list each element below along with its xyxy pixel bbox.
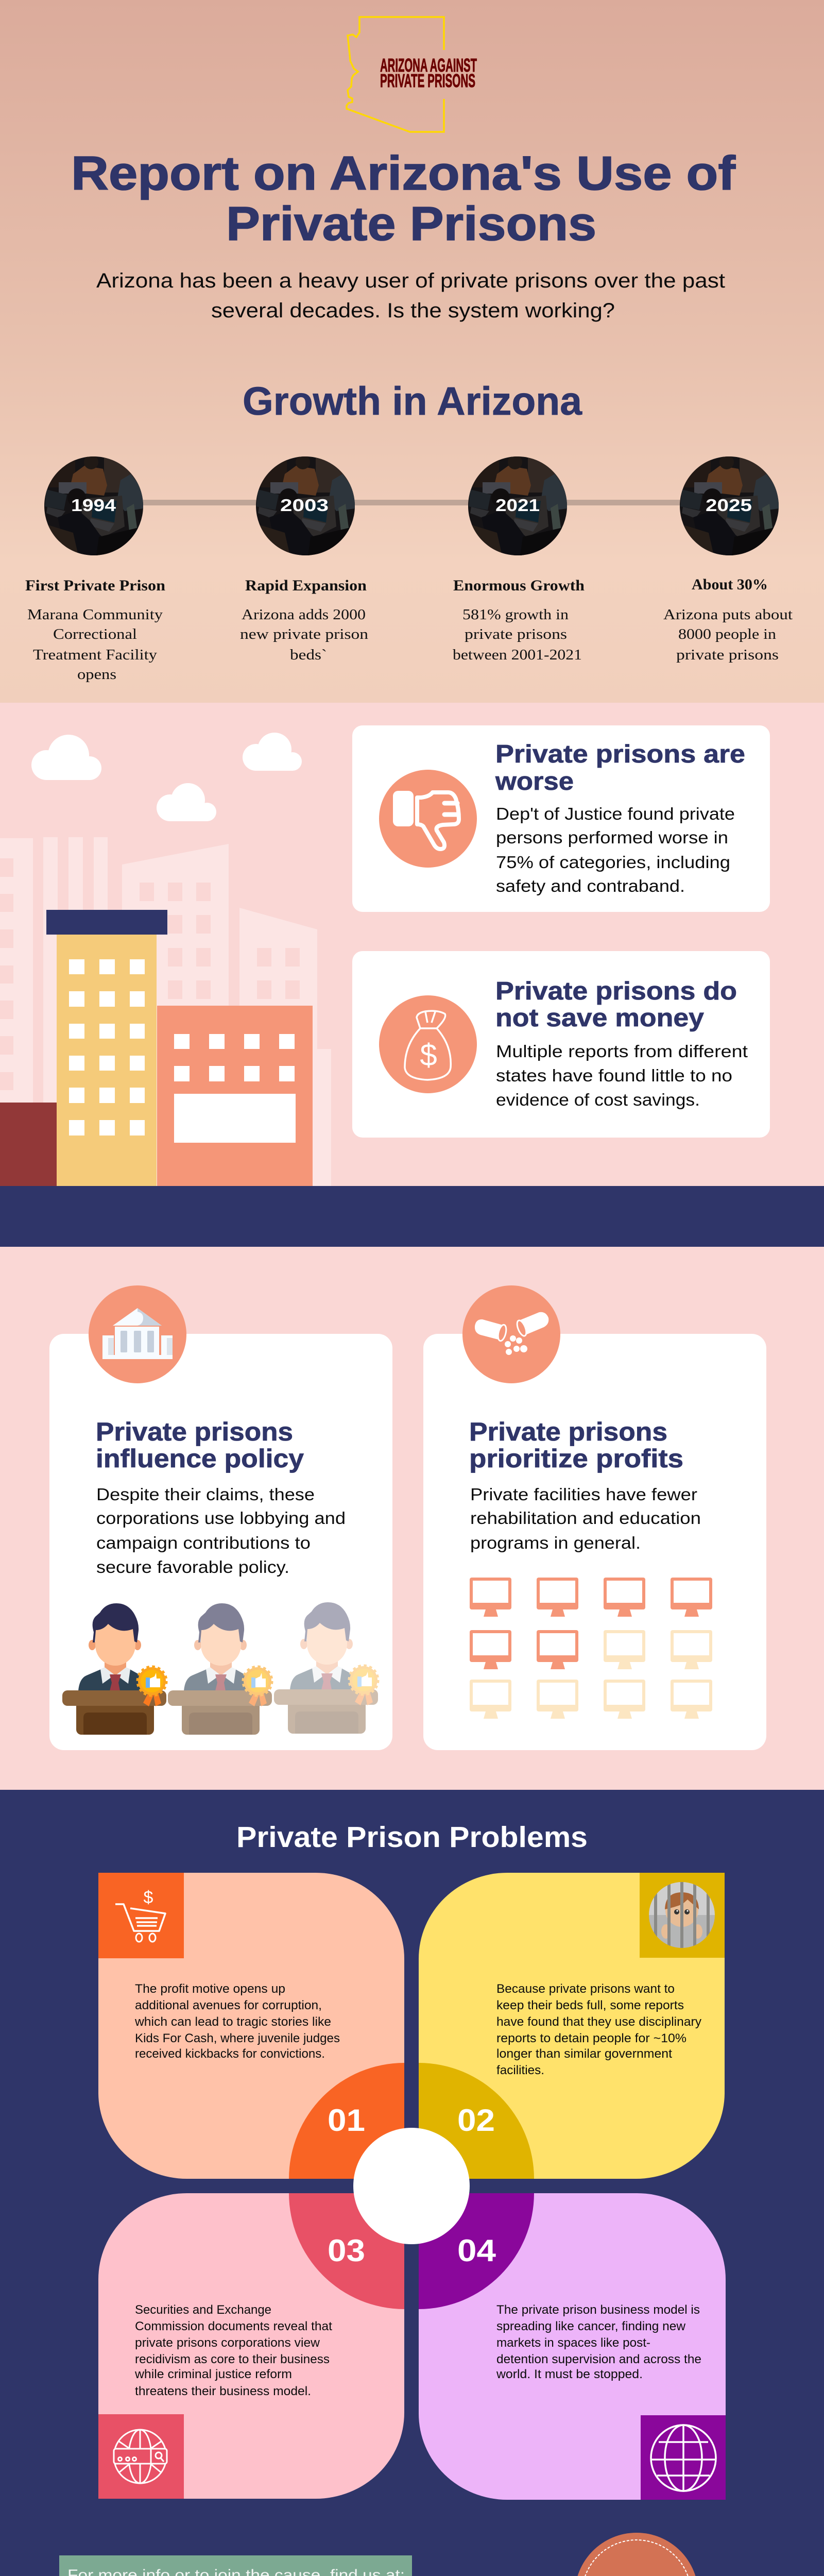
body text: reports to detain people for ~10%: [496, 2031, 686, 2045]
milestone text: About 30%: About 30%: [692, 576, 768, 593]
timeline node: 2003: 2003: [280, 496, 329, 515]
body text: private prisons corporations view: [135, 2336, 320, 2350]
pictogram: 6 of 12 monitors highlighted: [470, 1578, 712, 1719]
milestone text: Enormous Growth: between 2001-2021: [453, 647, 582, 663]
navy divider band: [0, 1186, 824, 1247]
heading: not save money: [495, 1004, 704, 1032]
title: [71, 146, 736, 250]
salmon building: [157, 1006, 313, 1187]
timeline node: 2003: [256, 455, 355, 555]
milestone text: First Private Prison: Marana Community: [27, 607, 163, 623]
body text: [496, 1042, 748, 1109]
navy lower background: [0, 1790, 824, 2576]
subtitle: several decades. Is the system working?: [211, 299, 615, 322]
pink page background: [0, 703, 824, 1790]
body text: programs in general.: [470, 1533, 641, 1552]
dark red building: [0, 1103, 57, 1187]
body text: Commission documents reveal that: [135, 2319, 332, 2333]
body text: spreading like cancer, finding new: [496, 2319, 686, 2333]
milestone text: First Private Prison: opens: [77, 667, 116, 683]
heading: Growth in Arizona: Growth in Arizona: [243, 379, 582, 423]
cloud: [31, 735, 101, 780]
body text: The private prison business model is: [496, 2303, 700, 2317]
milestone text: About 30%: private prisons: [676, 647, 779, 663]
body text: facilities.: [496, 2063, 544, 2077]
body text: Multiple reports from different: [496, 1042, 748, 1061]
icon: thumbs down: [379, 770, 477, 868]
card: Private prisons are worse: [352, 725, 770, 912]
body text: Kids For Cash, where juvenile judges: [135, 2031, 340, 2045]
icon: web search globe: [98, 2414, 184, 2499]
number: 02: [457, 2103, 495, 2138]
number: 03: [328, 2233, 365, 2268]
icon: globe: [641, 2415, 726, 2500]
body text: [134, 2303, 332, 2398]
body text: [496, 2303, 701, 2381]
logo: Arizona Against Private Prisons: PRIVATE PRISONS: [380, 70, 475, 91]
heading: [495, 977, 737, 1032]
milestone text: Rapid Expansion: beds`: [290, 647, 327, 663]
timeline node: 1994: [44, 455, 143, 555]
body text: states have found little to no: [496, 1066, 732, 1085]
body text: [134, 1982, 340, 2061]
subtitle: Arizona has been a heavy user of private prisons over the past: [96, 269, 725, 292]
body text: markets in spaces like post-: [496, 2336, 650, 2350]
icon: shopping cart: $: [144, 1888, 153, 1907]
timeline connector line: [94, 500, 729, 505]
milestone text: Enormous Growth: Enormous Growth: [453, 577, 585, 594]
heading: Private prisons: [469, 1417, 667, 1446]
body text: longer than similar government: [496, 2047, 672, 2061]
cloud: [157, 783, 216, 821]
number: 01: [328, 2103, 365, 2138]
panel: problem 03: [98, 2193, 404, 2499]
milestone text: About 30%: 8000 people in: [678, 626, 776, 642]
cloud: [243, 733, 302, 771]
timeline node: 2021: [468, 455, 567, 555]
body text: secure favorable policy.: [96, 1557, 289, 1577]
timeline node: 2025: [680, 455, 779, 555]
milestone text: Enormous Growth: private prisons: [465, 626, 567, 642]
logo: Arizona Against Private Prisons: [347, 17, 477, 132]
callout: email badge: [543, 2533, 728, 2576]
illustration: city skyline: [0, 733, 331, 1187]
milestone text: Rapid Expansion: [240, 577, 368, 663]
illustration: speakers at podiums: [62, 1602, 378, 1735]
body text: evidence of cost savings.: [496, 1090, 700, 1109]
heading: [469, 1417, 683, 1473]
body text: while criminal justice reform: [134, 2367, 292, 2381]
center white circle: [353, 2128, 470, 2244]
body text: Dep't of Justice found private: [496, 804, 735, 823]
milestone text: Enormous Growth: [453, 577, 585, 663]
logo: Arizona Against Private Prisons: ARIZONA AGAINST: [380, 55, 477, 76]
body text: [496, 1982, 701, 2077]
yellow building: [46, 910, 167, 1187]
body text: Because private prisons want to: [496, 1982, 675, 1996]
milestone text: First Private Prison: Treatment Facility: [33, 647, 157, 663]
icon: money bag: [379, 995, 477, 1093]
heading: [96, 1417, 304, 1473]
icon: broken capsule: [462, 1285, 560, 1383]
body text: The profit motive opens up: [135, 1982, 285, 1996]
body text: world. It must be stopped.: [496, 2367, 643, 2381]
icon: person behind bars: [640, 1873, 725, 1958]
card: Private prisons influence policy: [49, 1285, 392, 1750]
title: Report on Arizona's Use of: [71, 146, 736, 200]
body text: [470, 1485, 701, 1552]
background windows: [0, 858, 300, 1090]
body text: recidivism as core to their business: [135, 2352, 330, 2366]
heading: Private Prison Problems: Private Prison Problems: [236, 1821, 588, 1854]
callout: ribbon banner with website: [23, 2555, 449, 2576]
body text: keep their beds full, some reports: [496, 1998, 684, 2012]
milestone text: About 30%: Arizona puts about: [663, 607, 793, 623]
timeline node: 2021: 2021: [495, 496, 540, 515]
body text: persons performed worse in: [496, 828, 728, 847]
heading: prioritize profits: [469, 1444, 683, 1473]
icon: government building: [89, 1285, 186, 1383]
body text: rehabilitation and education: [470, 1509, 701, 1528]
body text: which can lead to tragic stories like: [134, 2015, 331, 2029]
body text: [96, 1485, 346, 1577]
heading: Private prisons are: [495, 740, 745, 768]
body text: additional avenues for corruption,: [135, 1998, 322, 2012]
icon: shopping cart: [98, 1873, 184, 1958]
milestone text: First Private Prison: First Private Prison: [25, 577, 165, 594]
panel: problem 02: [419, 1873, 725, 2179]
body text: threatens their business model.: [135, 2384, 311, 2398]
milestone text: Rapid Expansion: Rapid Expansion: [245, 577, 367, 594]
milestone text: Rapid Expansion: Arizona adds 2000: [242, 607, 366, 623]
body text: corporations use lobbying and: [96, 1509, 346, 1528]
body text: Securities and Exchange: [135, 2303, 271, 2317]
panel: problem 04: [419, 2193, 726, 2500]
body text: have found that they use disciplinary: [496, 2015, 701, 2029]
heading: Private prisons do: [495, 977, 737, 1005]
card: Private prisons do not save money: [352, 951, 770, 1138]
title: Private Prisons: [226, 197, 596, 250]
heading: worse: [495, 768, 574, 795]
milestone text: About 30%: [663, 576, 793, 663]
body text: safety and contraband.: [496, 876, 685, 895]
body text: campaign contributions to: [96, 1533, 311, 1552]
icon: money bag: $: [420, 1038, 437, 1072]
heading: influence policy: [96, 1444, 304, 1473]
body text: received kickbacks for convictions.: [135, 2047, 325, 2061]
body text: Despite their claims, these: [96, 1485, 315, 1504]
subtitle: [96, 269, 725, 322]
body text: detention supervision and across the: [496, 2352, 701, 2366]
milestone text: Enormous Growth: 581% growth in: [462, 607, 569, 623]
milestone text: First Private Prison: [25, 577, 165, 683]
number: 04: [457, 2233, 496, 2268]
panel: header and growth timeline: [0, 0, 824, 703]
timeline node: 2025: 2025: [706, 496, 752, 515]
body text: 75% of categories, including: [496, 853, 730, 872]
timeline node: 1994: 1994: [71, 496, 116, 515]
milestone text: First Private Prison: Correctional: [53, 626, 137, 642]
panel: problem 01: [98, 1873, 404, 2179]
body text: [496, 804, 735, 895]
heading: [495, 740, 745, 795]
milestone text: Rapid Expansion: new private prison: [240, 626, 368, 642]
body text: Private facilities have fewer: [470, 1485, 697, 1504]
background buildings: [0, 837, 331, 1186]
heading: Private prisons: [96, 1417, 293, 1446]
card: Private prisons prioritize profits: [423, 1285, 766, 1750]
